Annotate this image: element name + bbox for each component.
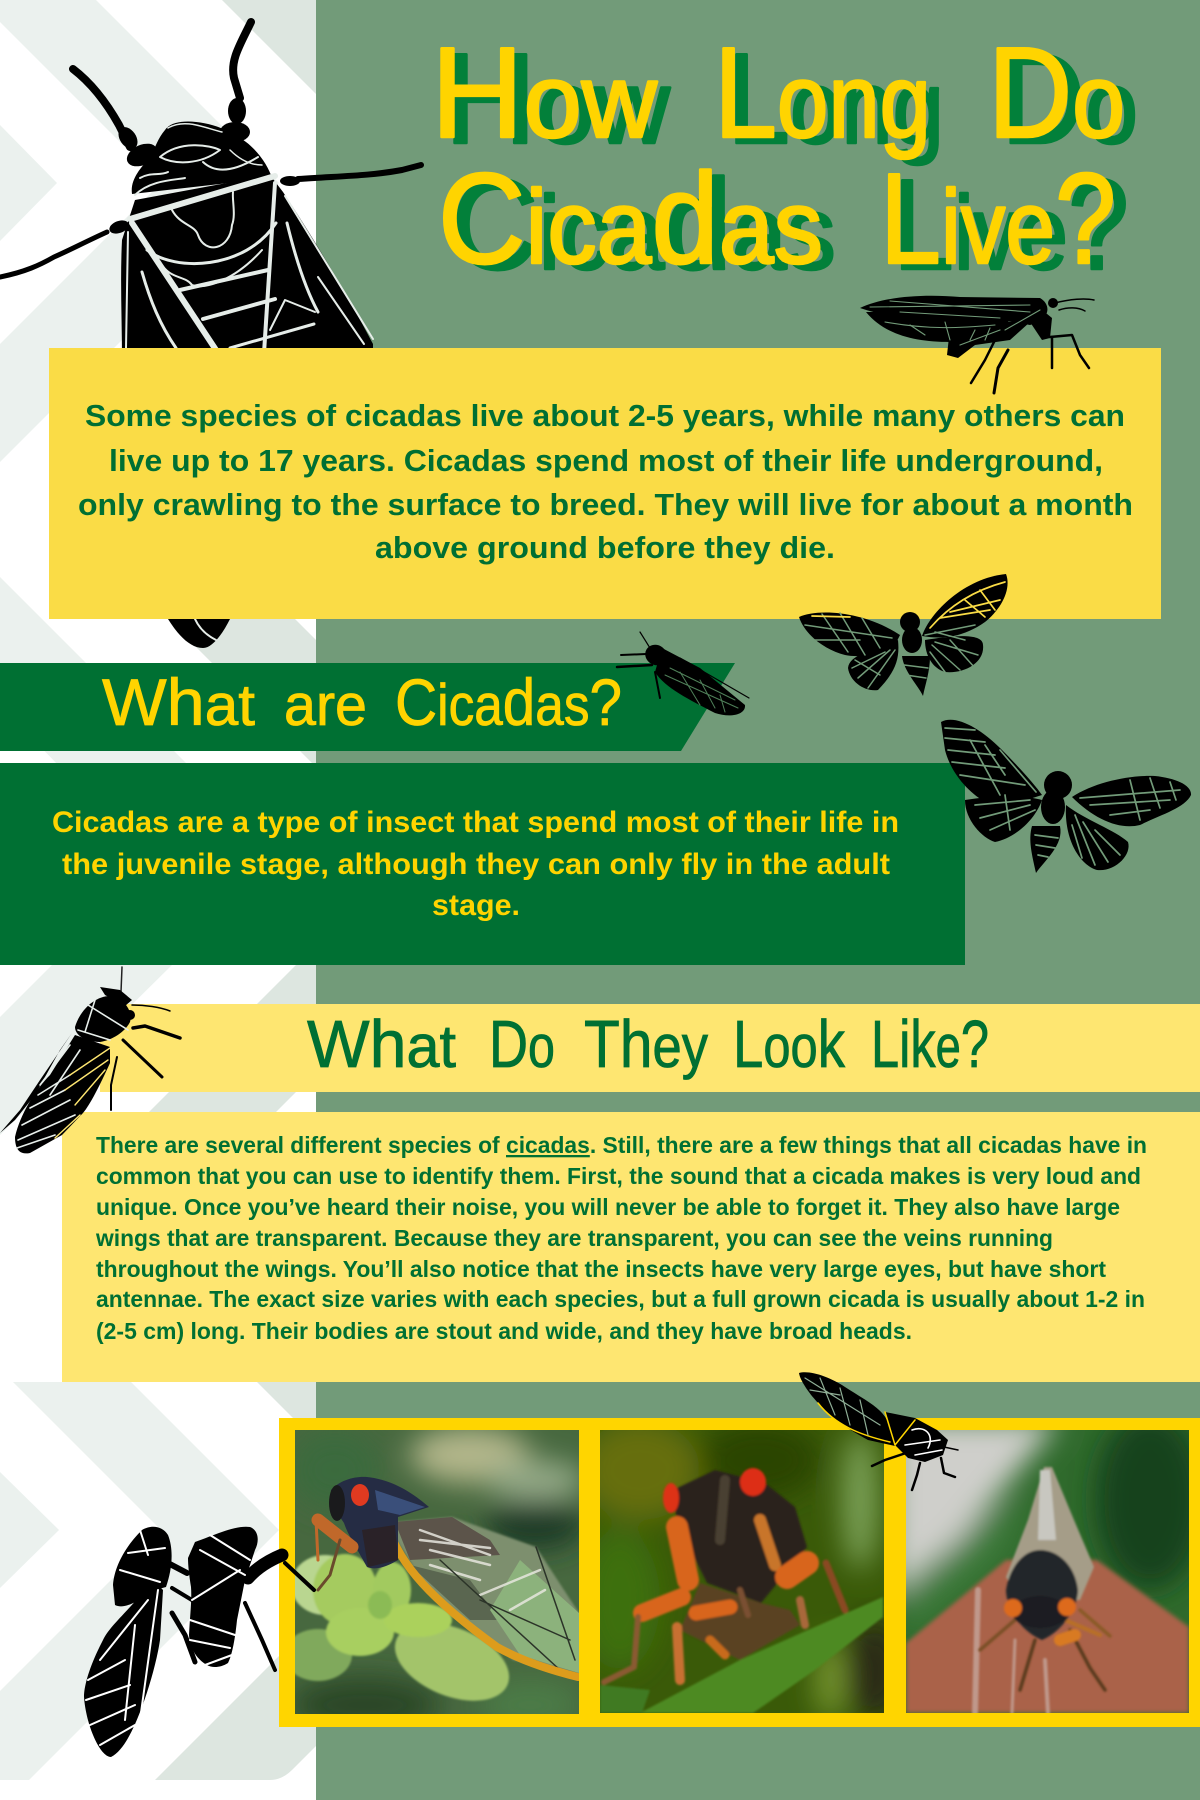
text: intro paragraph: above ground before they die.: [375, 530, 835, 565]
icon: diagonal cicada left of heading: [0, 967, 180, 1153]
text: definition paragraph: stage.: [432, 889, 520, 922]
banner: What are Cicadas: [0, 663, 735, 751]
heading: What are Cicadas?: Cicadas?: [395, 665, 622, 739]
panel: yellow photo frame: [279, 1410, 1200, 1733]
heading: What Do They Look Like?: Do: [489, 1007, 555, 1082]
text: definition paragraph: the juvenile stage, although they can only fly in the adult: [62, 848, 890, 881]
icon: large cicada silhouette top-left: [0, 22, 421, 648]
text: intro paragraph: Some species of cicadas live about 2-5 years, while many others can: [85, 398, 1125, 433]
title: [431, 21, 1125, 291]
heading: What Do They Look Like?: Look: [733, 1007, 845, 1082]
title: Live?: [880, 147, 1116, 291]
text: appearance paragraph: antennae. The exact size varies with each species, but a full grown cicada is usually about 1-2 in: [96, 1286, 1145, 1312]
icon: cicada perched on photo frame: [799, 1372, 958, 1490]
title: How: [431, 21, 658, 165]
text: appearance paragraph: There are several different species of cicadas. Still, there are a few things that all cicadas have in: [96, 1132, 1147, 1158]
text: appearance paragraph: throughout the wings. You’ll also notice that the insects have very large eyes, but have short: [96, 1256, 1106, 1282]
text: intro paragraph: [78, 398, 1133, 565]
text: definition paragraph: [52, 806, 899, 922]
heading: What are Cicadas?: [102, 665, 622, 739]
text: intro paragraph: live up to 17 years. Cicadas spend most of their life underground,: [109, 443, 1103, 478]
text: definition paragraph: Cicadas are a type of insect that spend most of their life in: [52, 806, 899, 839]
text: appearance paragraph: (2-5 cm) long. Their bodies are stout and wide, and they have broad heads.: [96, 1318, 912, 1344]
heading: What Do They Look Like?: Like?: [871, 1007, 989, 1082]
heading: What Do They Look Like?: They: [584, 1007, 708, 1082]
icon: small cicada on banner tip: [617, 632, 749, 715]
panel: intro yellow box: [49, 348, 1161, 619]
icon: paired cicadas bottom-left: [84, 1527, 314, 1757]
panel: left chevron pattern: [0, 0, 316, 1800]
icon: spread-wing cicada overlapping intro box: [799, 574, 1008, 696]
text: appearance paragraph: common that you can use to identify them. First, the sound that a cicada makes is very loud and: [96, 1163, 1141, 1189]
photo: front view cicada on leaf: [600, 1430, 884, 1713]
icon: spread-wing cicada right side: [941, 720, 1191, 873]
text: appearance paragraph: unique. Once you’ve heard their noise, you will never be able to forget it. They also have large: [96, 1194, 1120, 1220]
panel: appearance paragraph box: [62, 1112, 1200, 1382]
title: Do: [988, 21, 1125, 165]
title: Long: [714, 21, 931, 165]
icon: side-view cicada above intro box: [860, 296, 1094, 393]
heading: What are Cicadas?: What: [102, 665, 255, 739]
heading: What are Cicadas?: are: [284, 673, 367, 738]
photo: top view cicada on wood: [906, 1430, 1189, 1713]
heading: What Do They Look Like?: [307, 1007, 989, 1082]
title: Cicadas: [438, 147, 823, 291]
heading: What Do They Look Like?: What: [307, 1007, 456, 1082]
panel: what are cicadas definition: [0, 763, 965, 965]
photo: cicada on green leaves: [295, 1430, 579, 1714]
banner: What Do They Look Like: [100, 1004, 1200, 1092]
text: intro paragraph: only crawling to the surface to breed. They will live for about a month: [78, 487, 1133, 522]
text: appearance paragraph: [95, 1132, 1147, 1344]
text: appearance paragraph: wings that are transparent. Because they are transparent, you can see the veins running: [95, 1225, 1053, 1251]
